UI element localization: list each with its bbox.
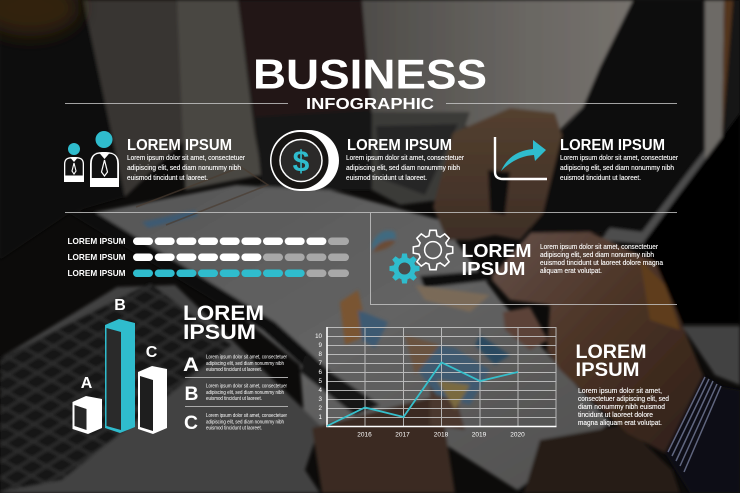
legend item C: C xyxy=(184,413,198,434)
title: BUSINESS xyxy=(253,50,487,98)
body text: magna aliquam erat volutpat. xyxy=(578,418,662,427)
legend item B xyxy=(184,384,287,405)
panel: chart description xyxy=(576,342,669,427)
x axis labels: 2016 xyxy=(357,432,372,438)
row 3 xyxy=(68,269,349,278)
legend item C xyxy=(184,413,287,434)
legend item A: adipiscing elit, sed diam nonummy nibh xyxy=(206,361,284,367)
row 2: LOREM IPSUM xyxy=(68,253,126,262)
heading xyxy=(462,240,532,279)
body text: tincidunt ut laoreet dolore xyxy=(578,410,653,419)
y axis labels: 1 xyxy=(319,414,323,421)
y axis labels: 8 xyxy=(319,351,323,358)
x axis labels: 2017 xyxy=(395,432,410,438)
icon: dollar coin xyxy=(270,130,339,191)
body text xyxy=(540,242,663,275)
legend item C: euismod tincidunt ut laoreet. xyxy=(206,426,262,432)
bar B: B xyxy=(114,297,126,314)
icon: business people xyxy=(64,131,119,187)
body text: Lorem ipsum dolor sit amet, consectetuer xyxy=(560,153,679,162)
row 3: LOREM IPSUM xyxy=(68,269,126,278)
body text xyxy=(127,153,246,182)
panel: people xyxy=(64,131,246,187)
legend item B: adipiscing elit, sed diam nonummy nibh xyxy=(206,390,284,396)
heading: LOREM xyxy=(462,240,532,261)
body text: aliquam erat volutpat. xyxy=(540,266,602,275)
y axis labels xyxy=(315,333,323,421)
data line xyxy=(327,362,518,426)
icon: growth arrow xyxy=(495,137,547,179)
legend item B: Lorem ipsum dolor sit amet, consectetuer xyxy=(206,384,287,390)
legend item C: Lorem ipsum dolor sit amet, consectetuer xyxy=(206,413,287,419)
title: INFOGRAPHIC xyxy=(306,96,434,113)
y axis labels: 9 xyxy=(319,342,323,349)
clipboard clip xyxy=(136,167,268,225)
heading: LOREM xyxy=(183,302,264,325)
row 1: LOREM IPSUM xyxy=(68,237,126,246)
panel: settings xyxy=(389,230,663,284)
body text: adipiscing elit, sed diam nonummy nibh xyxy=(560,163,674,172)
body text: Lorem ipsum dolor sit amet, xyxy=(578,386,662,395)
row 1 xyxy=(68,237,349,246)
y axis labels: 6 xyxy=(319,369,323,376)
heading: LOREM IPSUM xyxy=(127,137,232,154)
body text: diam nonummy nibh euismod xyxy=(578,402,665,411)
body text xyxy=(346,153,465,182)
panel: growth xyxy=(495,137,679,182)
bar C: C xyxy=(146,344,158,361)
y axis labels: 5 xyxy=(319,378,323,385)
legend item A: Lorem ipsum dolor sit amet, consectetuer xyxy=(206,354,287,360)
title xyxy=(253,50,487,113)
heading: LOREM IPSUM xyxy=(560,137,665,154)
bar A: A xyxy=(81,375,93,392)
body text: adipiscing elit, sed diam nonummy nibh xyxy=(346,163,460,172)
heading: LOREM xyxy=(576,342,646,363)
heading xyxy=(183,302,264,344)
heading: LOREM IPSUM xyxy=(347,137,452,154)
legend item B: B xyxy=(184,384,198,405)
panel: A B C legend xyxy=(183,302,288,434)
body text: euismod tincidunt ut laoreet. xyxy=(560,173,641,182)
line chart xyxy=(315,327,556,438)
shirt cuff stripes xyxy=(668,377,721,472)
heading xyxy=(576,342,646,381)
x axis labels: 2020 xyxy=(510,432,525,438)
heading: IPSUM xyxy=(183,321,256,344)
x axis labels xyxy=(357,432,525,438)
x axis labels: 2018 xyxy=(434,432,449,438)
y axis labels: 3 xyxy=(319,396,323,403)
legend item B: euismod tincidunt ut laoreet. xyxy=(206,396,262,402)
body text: Lorem ipsum dolor sit amet, consectetuer xyxy=(346,153,465,162)
x axis labels: 2019 xyxy=(472,432,487,438)
legend item C: adipiscing elit, sed diam nonummy nibh xyxy=(206,420,284,426)
legend item A: A xyxy=(183,355,199,376)
y axis labels: 4 xyxy=(319,387,323,394)
legend item A xyxy=(183,354,287,376)
body text xyxy=(578,386,669,427)
y axis labels: 2 xyxy=(319,405,323,412)
heading: IPSUM xyxy=(462,258,526,279)
body text: euismod tincidunt ut laoreet dolore magna xyxy=(540,258,663,267)
body text: consectetuer adipiscing elit, sed xyxy=(578,394,669,403)
body text xyxy=(560,153,679,182)
icon: dollar coin: $ xyxy=(293,146,310,178)
icon: gears xyxy=(389,230,453,284)
body text: euismod tincidunt ut laoreet. xyxy=(346,173,427,182)
row 2 xyxy=(68,253,349,262)
body text: euismod tincidunt ut laoreet. xyxy=(127,173,208,182)
y axis labels: 10 xyxy=(315,333,323,340)
legend item A: euismod tincidunt ut laoreet. xyxy=(206,367,262,373)
y axis labels: 7 xyxy=(319,360,323,367)
body text: Lorem ipsum dolor sit amet, consectetuer xyxy=(540,242,659,251)
heading: IPSUM xyxy=(576,360,640,381)
body text: adipiscing elit, sed diam nonummy nibh xyxy=(540,250,654,259)
body text: Lorem ipsum dolor sit amet, consectetuer xyxy=(127,153,246,162)
body text: adipiscing elit, sed diam nonummy nibh xyxy=(127,163,241,172)
chart: 3D bars A B C xyxy=(72,297,167,434)
panel: progress bars xyxy=(68,237,349,278)
panel: finance xyxy=(270,130,465,191)
